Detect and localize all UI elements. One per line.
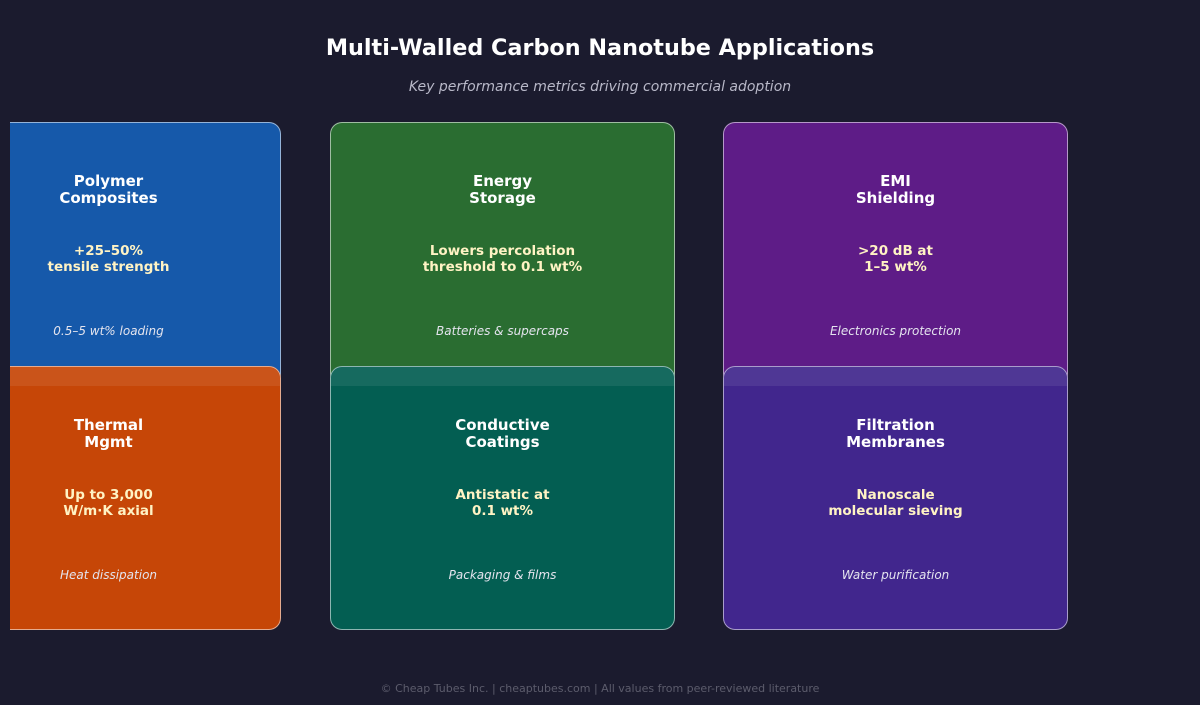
- panel: polymer composites: tensile strength: [47, 259, 170, 275]
- panel: thermal mgmt: [0, 366, 281, 630]
- panel: EMI shielding: >20 dB at: [858, 243, 933, 259]
- panel: polymer composites: Polymer: [74, 172, 143, 190]
- panel: EMI shielding: EMI: [880, 172, 911, 190]
- panel: thermal mgmt: Thermal: [74, 416, 143, 434]
- panel: filtration membranes: Filtration: [856, 416, 935, 434]
- panel: conductive coatings: Packaging & films: [449, 568, 556, 582]
- panel: thermal mgmt: Mgmt: [84, 433, 133, 451]
- panel: conductive coatings: Antistatic at: [455, 487, 550, 503]
- panel: polymer composites: +25–50%: [74, 243, 143, 259]
- footer: © Cheap Tubes Inc. | cheaptubes.com | All values from peer-reviewed literature: [381, 682, 819, 695]
- panel: filtration membranes: Nanoscale: [856, 487, 935, 503]
- subtitle: Key performance metrics driving commercial adoption: [409, 79, 791, 95]
- panel: filtration membranes: molecular sieving: [828, 503, 963, 519]
- panel: EMI shielding: 1–5 wt%: [864, 259, 927, 275]
- panel: thermal mgmt: Up to 3,000: [64, 487, 153, 503]
- panel: energy storage: Energy: [473, 172, 532, 190]
- panel: conductive coatings: [330, 366, 675, 630]
- panel: energy storage: [330, 122, 675, 386]
- panel: thermal mgmt: Heat dissipation: [60, 568, 157, 582]
- panel: conductive coatings: Conductive: [455, 416, 550, 434]
- panel: conductive coatings: Coatings: [465, 433, 540, 451]
- panel: polymer composites: 0.5–5 wt% loading: [53, 324, 164, 338]
- panel: polymer composites: Composites: [59, 189, 158, 207]
- panel: EMI shielding: [723, 122, 1068, 386]
- panel: energy storage: Batteries & supercaps: [436, 324, 569, 338]
- panel: EMI shielding: Electronics protection: [830, 324, 961, 338]
- panel: EMI shielding: Shielding: [856, 189, 935, 207]
- panel: filtration membranes: Water purification: [842, 568, 949, 582]
- panel: energy storage: Lowers percolation: [430, 243, 575, 259]
- panel: filtration membranes: [723, 366, 1068, 630]
- panel: thermal mgmt: W/m·K axial: [63, 503, 154, 519]
- panel: filtration membranes: Membranes: [846, 433, 945, 451]
- panel: conductive coatings: 0.1 wt%: [472, 503, 533, 519]
- panel: energy storage: Storage: [469, 189, 536, 207]
- panel: energy storage: threshold to 0.1 wt%: [423, 259, 582, 275]
- title: Multi-Walled Carbon Nanotube Applications: [326, 35, 874, 61]
- panel: polymer composites: [0, 122, 281, 386]
